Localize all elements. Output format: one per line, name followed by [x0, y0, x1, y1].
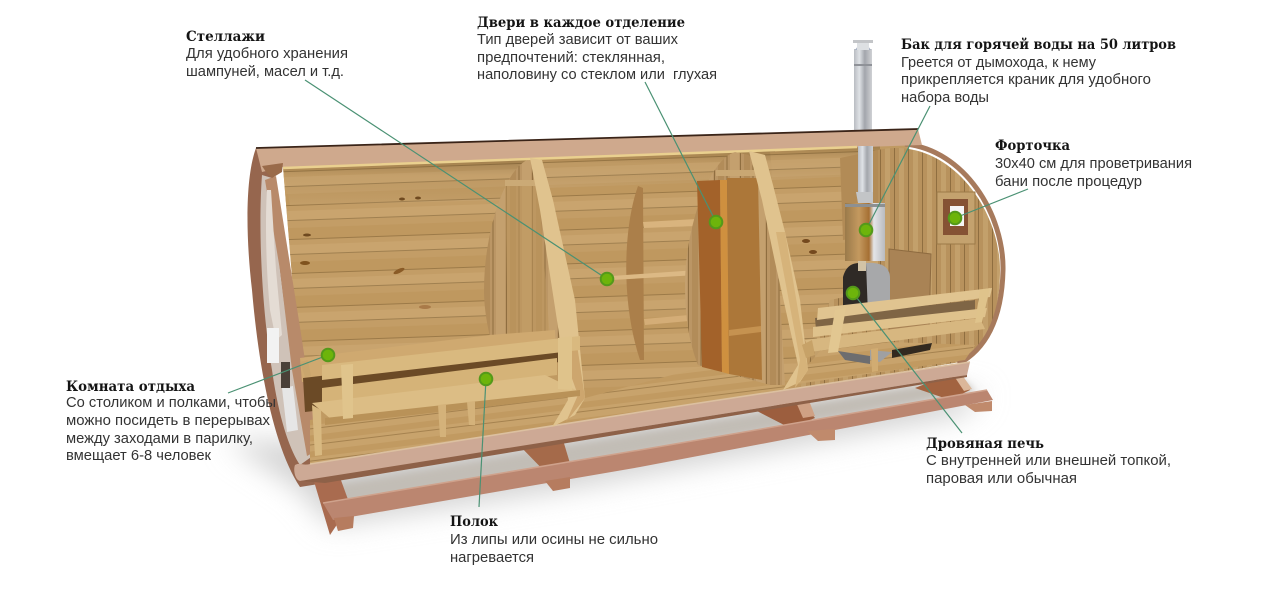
- callout: doors: Двери в каждое отделение: [477, 15, 685, 31]
- chimney: [849, 40, 877, 135]
- partition 1 edge strip: [530, 158, 585, 427]
- callout: bench: [450, 514, 658, 566]
- callout: shelves: шампуней, масел и т.д.: [186, 64, 344, 80]
- top rail: [817, 288, 992, 320]
- callout: water tank: прикрепляется краник для удобного: [901, 72, 1151, 88]
- end wall rim: [905, 144, 1003, 364]
- back wall: left room: [283, 160, 530, 375]
- seat: [312, 375, 580, 420]
- second rail: [322, 358, 557, 405]
- callout: rest room: [66, 379, 276, 464]
- wall behind bench: [300, 330, 556, 382]
- right bench: [802, 288, 992, 372]
- back wall: middle room: [540, 150, 800, 405]
- skid foot blocks: [334, 401, 992, 531]
- second rail: [813, 308, 987, 337]
- partition 1 face: [484, 160, 560, 345]
- callout: bench: Из липы или осины не сильно: [450, 532, 658, 548]
- roof rim: [256, 129, 922, 178]
- callout: doors: [477, 15, 717, 83]
- callout: rest room: вмещает 6-8 человек: [66, 448, 212, 464]
- callout: bench: Полок: [450, 514, 498, 530]
- ground shadow: [225, 378, 985, 525]
- callout: rest room: Со столиком и полками, чтобы: [66, 395, 276, 411]
- stove: [838, 261, 932, 364]
- callout: shelves: [186, 29, 348, 80]
- water tank: [845, 146, 885, 261]
- left barrel end: [247, 148, 325, 487]
- top rail: [322, 336, 580, 380]
- callout: vent: [995, 138, 1192, 190]
- partition 2 face: [685, 152, 785, 385]
- shelves: [612, 186, 760, 360]
- partition 2 with door: [685, 151, 808, 390]
- callout: vent: 30х40 см для проветривания: [995, 156, 1192, 172]
- callout: stove: С внутренней или внешней топкой,: [926, 453, 1171, 469]
- leader lines: [228, 80, 1028, 507]
- callout: rest room: между заходами в парилку,: [66, 431, 253, 447]
- callout: stove: [926, 436, 1171, 487]
- callout: shelves: Для удобного хранения: [186, 46, 348, 62]
- callout: rest room: Комната отдыха: [66, 379, 195, 395]
- end wall planks: [800, 148, 1000, 388]
- seat front: [325, 390, 580, 425]
- callout: doors: предпочтений: стеклянная,: [477, 50, 665, 66]
- door: [697, 178, 762, 380]
- back wall: right room: [770, 146, 880, 360]
- skid cradles: [313, 372, 972, 535]
- posts: [341, 364, 353, 419]
- callout: stove: Дровяная печь: [926, 436, 1044, 452]
- sill beam: [294, 362, 970, 483]
- partition 2 edge strip: [749, 151, 808, 390]
- callout: rest room: можно посидеть в перерывах: [66, 413, 271, 429]
- wall panel behind stove: [889, 249, 931, 330]
- callout: shelves: Стеллажи: [186, 29, 265, 45]
- vent window: [937, 192, 975, 244]
- callout: bench: нагревается: [450, 550, 534, 566]
- callout: vent: бани после процедур: [995, 174, 1142, 190]
- end wall and stove side: [800, 144, 1003, 388]
- callout: water tank: Греется от дымохода, к нему: [901, 55, 1097, 71]
- partition 1: [484, 158, 585, 427]
- callout: doors: Тип дверей зависит от ваших: [477, 32, 679, 48]
- interior base fill: [283, 143, 1000, 468]
- left room bench: [300, 330, 580, 456]
- green markers: [322, 212, 961, 385]
- callout: doors: наполовину со стеклом или глухая: [477, 67, 717, 83]
- seat: [805, 318, 985, 352]
- floors: [310, 340, 975, 465]
- callout: water tank: Бак для горячей воды на 50 литров: [901, 36, 1176, 53]
- callout: water tank: [901, 36, 1176, 106]
- gap under rails: [303, 348, 560, 412]
- callout: vent: Форточка: [995, 138, 1070, 154]
- long skid beam: [323, 390, 993, 520]
- callout: water tank: набора воды: [901, 90, 989, 106]
- callout: stove: паровая или обычная: [926, 471, 1077, 487]
